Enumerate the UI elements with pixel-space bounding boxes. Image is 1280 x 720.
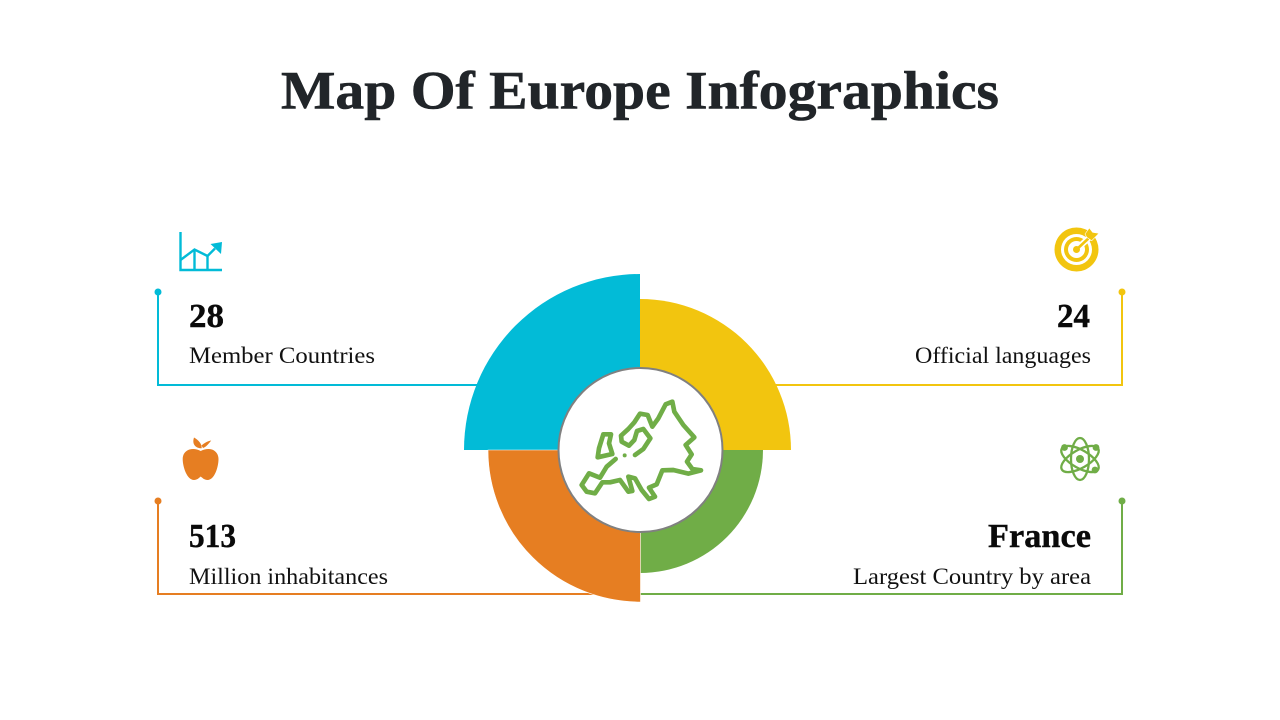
icon: atom [1057, 438, 1103, 480]
label: Member Countries [189, 343, 375, 368]
value: 513 [189, 518, 236, 555]
icon: growth chart [180, 232, 222, 270]
value: 24 [1057, 298, 1090, 335]
block: million inhabitances [183, 438, 388, 589]
value: France [988, 518, 1091, 555]
icon: target [1054, 228, 1099, 272]
title: Map Of Europe Infographics [281, 60, 999, 120]
connector: largest country [640, 498, 1126, 594]
block: largest country [853, 438, 1103, 589]
connector: million inhabitances [154, 498, 640, 594]
connector: official languages [770, 288, 1126, 385]
label: Largest Country by area [853, 564, 1091, 589]
block: member countries [180, 232, 375, 368]
value: 28 [189, 298, 224, 335]
icon: apple [183, 438, 218, 480]
icon: map of europe [582, 402, 701, 499]
label: Million inhabitances [189, 564, 388, 589]
segment: green [640, 450, 763, 573]
label: Official languages [915, 343, 1091, 368]
segment: yellow [640, 299, 791, 450]
connector: member countries [154, 288, 480, 385]
donut chart [464, 274, 791, 602]
segment: orange [488, 450, 640, 602]
segment: blue [464, 274, 640, 450]
block: official languages [915, 228, 1099, 368]
center circle [558, 368, 722, 532]
